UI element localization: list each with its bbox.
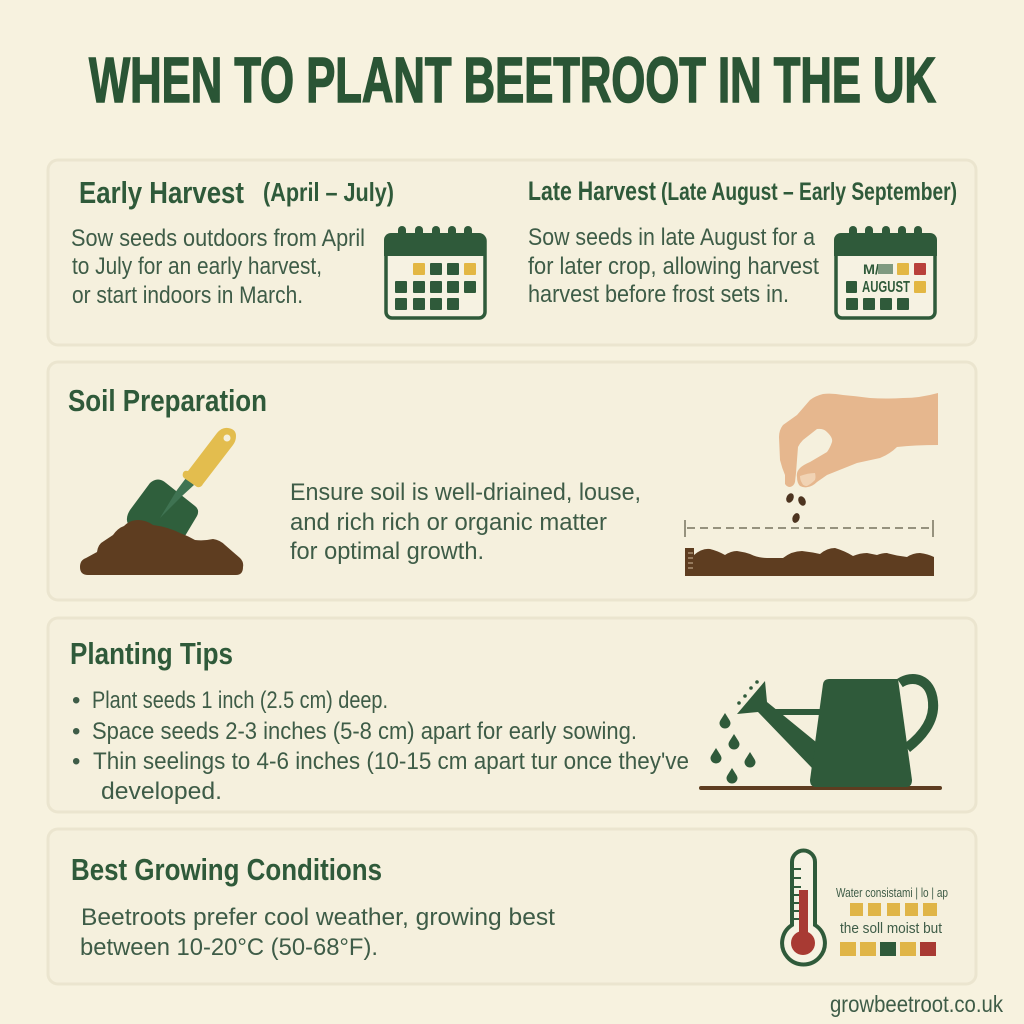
text: soil preparation description: and rich rich or organic matter: [290, 509, 607, 536]
heading: best growing conditions: Best Growing Conditions: [71, 852, 382, 887]
text: early harvest description: or start indoors in March.: [72, 282, 303, 309]
text: late harvest description: for later crop, allowing harvest: [528, 253, 819, 280]
text: tips list: developed.: [101, 778, 222, 805]
panel: best growing conditions: [48, 829, 976, 984]
text: conditions description: Beetroots prefer cool weather, growing best: [81, 904, 555, 931]
text: tips list: Space seeds 2-3 inches (5-8 cm) apart for early sowing.: [92, 718, 637, 745]
text: soil preparation description: [290, 479, 641, 565]
icon: watering can: [701, 679, 940, 788]
icon: late calendar: M/: [863, 261, 879, 277]
text: tips list: •: [72, 718, 80, 745]
icon: late calendar: [834, 226, 937, 318]
heading: early harvest: Early Harvest: [79, 175, 244, 210]
text: late harvest description: [528, 224, 819, 308]
heading: soil preparation: Soil Preparation: [68, 383, 267, 418]
text and swatches: moisture: the soll moist but: [840, 920, 943, 937]
heading: early harvest dates: (April – July): [263, 177, 394, 207]
website credit: growbeetroot.co.uk: [830, 991, 1003, 1017]
panel: harvest times: [48, 160, 976, 345]
text: tips list: Plant seeds 1 inch (2.5 cm) deep.: [92, 687, 388, 714]
icon: hand sowing seeds: [685, 393, 938, 576]
heading: late harvest: Late Harvest: [528, 176, 656, 206]
text: conditions description: between 10-20°C (50-68°F).: [80, 934, 378, 961]
icon: trowel in soil: [80, 428, 243, 575]
panel: soil preparation: [48, 362, 976, 600]
panel: planting tips: [48, 618, 976, 812]
text: early harvest description: Sow seeds outdoors from April: [71, 225, 365, 252]
icon: late calendar: AUGUST: [862, 279, 910, 296]
text: tips list: •: [72, 748, 80, 775]
text and swatches: moisture: Water consistami | lo | ap: [836, 885, 948, 900]
icon: early calendar: [384, 226, 486, 318]
text: soil preparation description: Ensure soil is well-driained, louse,: [290, 479, 641, 506]
text: tips list: [72, 687, 689, 805]
heading: planting tips: Planting Tips: [70, 636, 233, 671]
text: soil preparation description: for optimal growth.: [290, 538, 484, 565]
text: late harvest description: Sow seeds in late August for a: [528, 224, 816, 251]
text: early harvest description: to July for an early harvest,: [72, 253, 322, 280]
text: tips list: Thin seelings to 4-6 inches (10-15 cm apart tur once they've: [93, 748, 689, 775]
text: conditions description: [80, 904, 555, 961]
text: early harvest description: [71, 225, 365, 309]
text: tips list: •: [72, 687, 80, 714]
text and swatches: moisture: [836, 885, 948, 956]
icon: thermometer: [782, 850, 825, 964]
text: late harvest description: harvest before frost sets in.: [528, 281, 789, 308]
